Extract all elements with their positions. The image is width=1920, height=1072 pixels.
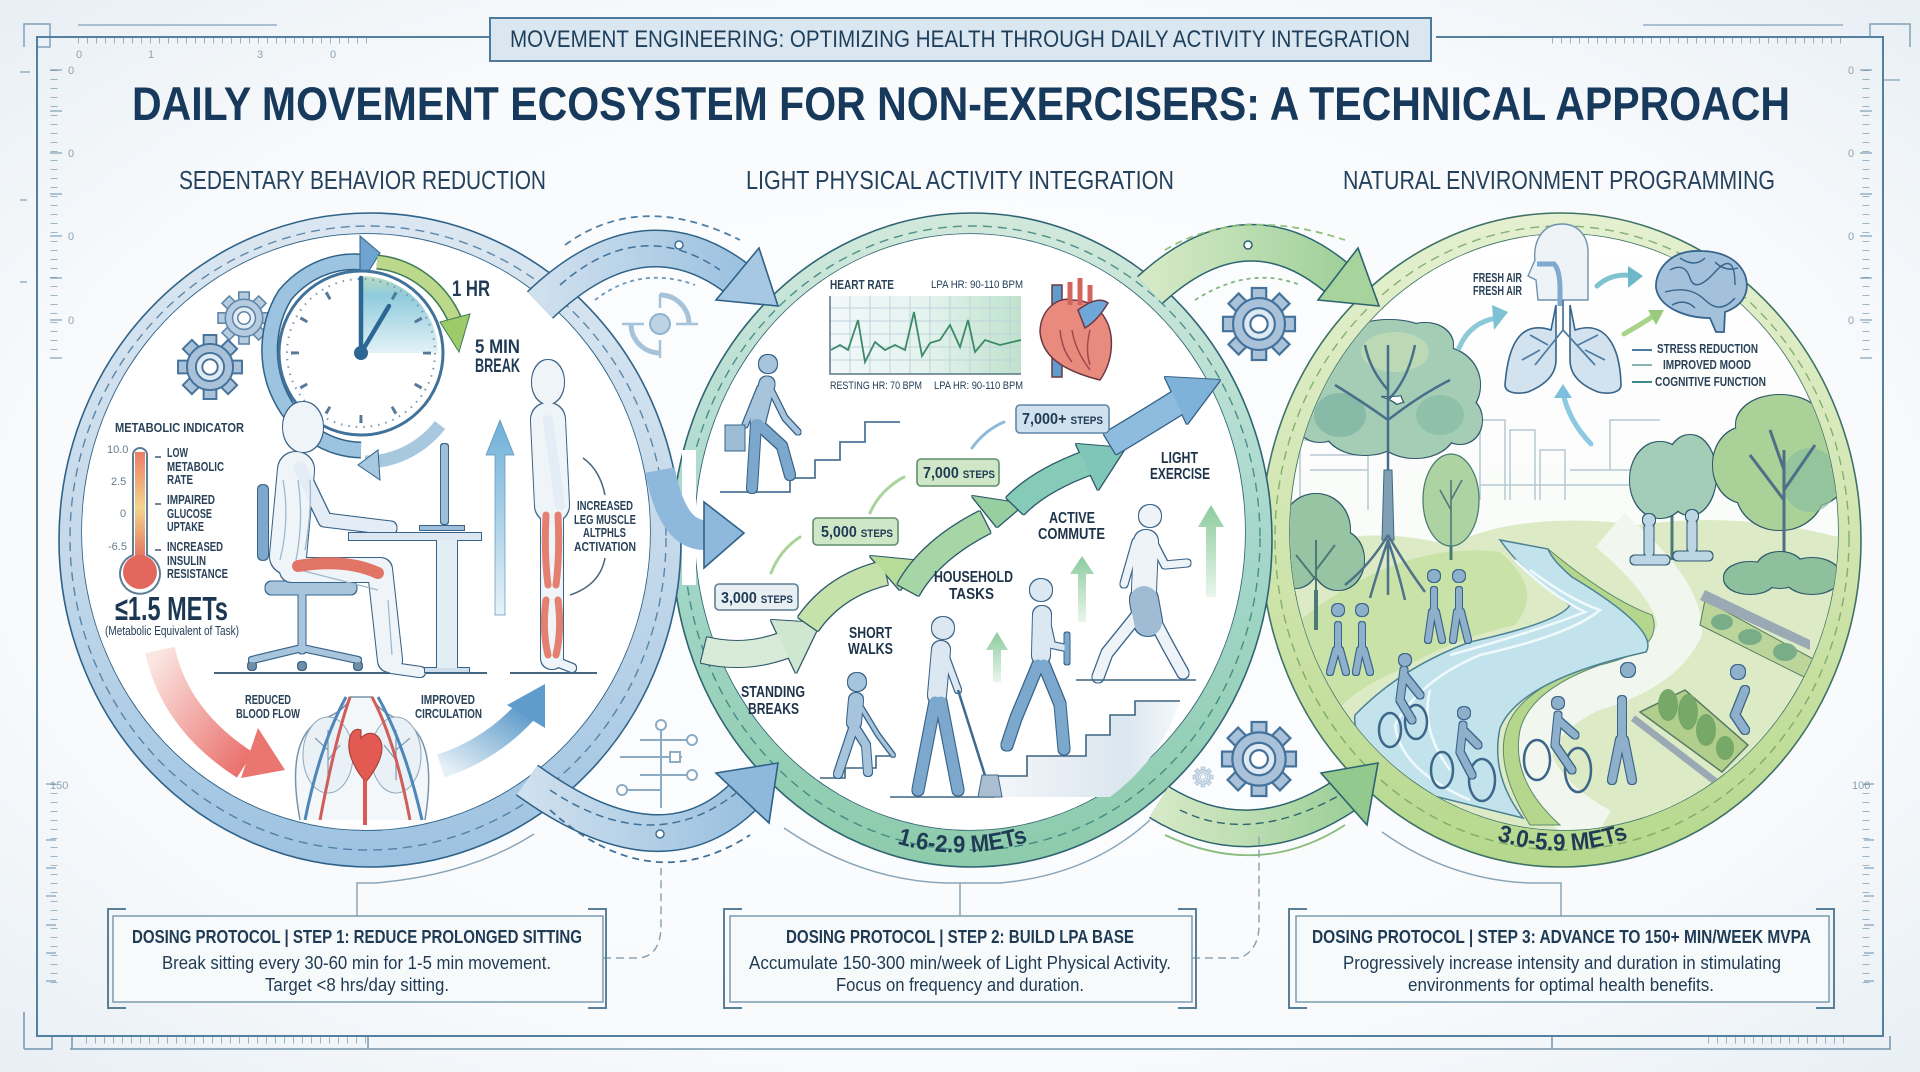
label: leg muscle: LEG MUSCLE (574, 513, 636, 527)
icon: small gear (1193, 767, 1213, 787)
ruler numbers: 150 (50, 780, 68, 792)
label: light exercise: LIGHT (1161, 450, 1198, 467)
step pill 5000: 5,000 STEPS (821, 524, 893, 541)
garden beds (1633, 590, 1815, 785)
lower staircase (820, 701, 1180, 797)
icon: target (622, 294, 698, 358)
heart rate chart (830, 296, 1021, 374)
walkers (1330, 570, 1468, 672)
label: active commute (1038, 510, 1105, 543)
ruler numbers: 0 (1848, 65, 1854, 77)
label: light exercise (1150, 450, 1210, 483)
dosing box 3: DOSING PROTOCOL | STEP 3: ADVANCE TO 150+ MIN/WEEK MVPA (1312, 927, 1811, 947)
chart labels: LPA HR: 90-110 BPM (931, 279, 1023, 291)
benefits legend: COGNITIVE FUNCTION (1655, 375, 1766, 389)
ruler numbers: 0 (330, 49, 336, 61)
clock face (279, 271, 443, 435)
step pill 7000+ (1016, 405, 1109, 433)
label: leg muscle: INCREASED (577, 499, 633, 513)
metabolic indicator: INCREASED (167, 540, 223, 554)
ground (1280, 520, 1850, 840)
label: improved circulation (415, 693, 482, 721)
icon: gear connector upper (1223, 288, 1295, 360)
label: 5 min break: BREAK (475, 356, 520, 377)
panel: respiratory and brain (1459, 224, 1766, 444)
ring: natural environment (1261, 213, 1861, 867)
connector: bottom 2 to 3 (1159, 763, 1378, 828)
metabolic indicator: -6.5 (108, 541, 127, 553)
standing figure (510, 360, 597, 673)
arrow: improved flow (441, 684, 545, 766)
metabolic indicator: 0 (120, 508, 126, 520)
panel: natural environment scene (1271, 320, 1850, 840)
ring: light activity (672, 213, 1272, 867)
metabolic indicator: 10.0 (107, 444, 128, 456)
step pill 5000 (813, 518, 898, 545)
meditators (1635, 510, 1708, 560)
step pill 7000 (917, 459, 999, 486)
connector: top 1 to 2 (540, 241, 778, 306)
step pill 3000 (715, 584, 798, 610)
ring label: light mets (898, 828, 1026, 853)
ruler numbers: 0 (76, 49, 82, 61)
label: 1 hr: 1 HR (452, 276, 490, 301)
label: fresh air (1473, 271, 1522, 298)
header banner: MOVEMENT ENGINEERING: OPTIMIZING HEALTH THROUGH DAILY ACTIVITY INTEGRATION (510, 26, 1410, 53)
label: standing breaks: BREAKS (748, 701, 799, 718)
gardeners (1612, 663, 1745, 780)
ring details (70, 226, 1849, 850)
cyclists (1379, 705, 1591, 801)
tree: small left (1290, 493, 1365, 630)
dosing box 3 (1289, 909, 1834, 1008)
up arrows (986, 505, 1224, 682)
sitting figure and desk (214, 402, 487, 673)
label: short walks: SHORT (849, 625, 892, 642)
metabolic indicator: INSULIN (167, 554, 206, 568)
label: short walks (848, 625, 893, 658)
rising arrow 1 (704, 620, 820, 673)
dosing box 2: Accumulate 150-300 min/week of Light Physical Activity. (749, 953, 1171, 973)
ruler numbers: 0 (68, 65, 74, 77)
metabolic indicator (107, 421, 244, 594)
hill: left bank (1300, 550, 1527, 720)
person: short walker (838, 673, 893, 774)
leader lines (357, 820, 1561, 958)
metabolic indicator: GLUCOSE (167, 507, 212, 521)
metabolic indicator: RESISTANCE (167, 567, 228, 581)
ring gap beside middle arrow (682, 450, 696, 585)
tree: big (1296, 320, 1482, 600)
label: leg muscle: ACTIVATION (574, 540, 636, 554)
panel: sedentary contents (105, 236, 636, 825)
dosing box 2 (724, 909, 1196, 1008)
mets value: ≤1.5 METs (115, 590, 228, 627)
right bank green (1503, 549, 1654, 825)
small arrows between pills (771, 422, 1004, 573)
rising arrow 5 (1110, 377, 1220, 444)
dosing box 1 (108, 909, 606, 1008)
header banner (490, 18, 1431, 61)
label: 5 min break (475, 337, 520, 377)
icon: head profile (1528, 224, 1588, 306)
ruler numbers: 0 (1848, 148, 1854, 160)
icon: circuit schematic (617, 720, 697, 808)
label: reduced blood flow: REDUCED (245, 693, 291, 707)
person: jogger (1098, 505, 1187, 677)
ring: sedentary (59, 213, 681, 867)
icon: lungs (1505, 300, 1621, 393)
ruler numbers: 0 (68, 315, 74, 327)
label: improved circulation: CIRCULATION (415, 707, 482, 721)
ruler numbers: 1 (148, 49, 154, 61)
tree: small middle (1423, 454, 1479, 560)
label: active commute: ACTIVE (1049, 510, 1095, 527)
trees (1271, 320, 1849, 630)
panel: light activity contents (700, 278, 1224, 853)
metabolic indicator: 2.5 (111, 476, 126, 488)
flow arrow heads (1492, 266, 1664, 398)
city outline (1300, 420, 1660, 510)
label: household tasks (934, 569, 1013, 603)
metabolic indicator: LOW (167, 446, 188, 460)
up arrow (486, 420, 514, 615)
stair climber (720, 355, 900, 492)
icon: gear connector lower (1222, 722, 1296, 796)
label: leg muscle: ALTPHLS (583, 526, 626, 540)
dosing box 3: environments for optimal health benefits. (1408, 975, 1714, 995)
label: short walks: WALKS (848, 641, 893, 658)
ruler numbers: 0 (68, 148, 74, 160)
tree: big right (1712, 394, 1836, 552)
dosing box 2: Focus on frequency and duration. (836, 975, 1084, 995)
rising arrow 3 (908, 496, 1024, 590)
label: light exercise: EXERCISE (1150, 466, 1210, 483)
pale path (1530, 530, 1680, 830)
dosing box 1: DOSING PROTOCOL | STEP 1: REDUCE PROLONGED SITTING (132, 927, 582, 947)
river (1355, 540, 1648, 818)
connector: top 2 to 3 (1150, 241, 1379, 306)
benefits legend (1632, 342, 1766, 389)
dosing box 3: Progressively increase intensity and duration in stimulating (1343, 953, 1781, 973)
label: 5 min break: 5 MIN (475, 337, 520, 358)
ruler numbers: 0 (1848, 231, 1854, 243)
connector: middle arrow 1 to 2 (660, 470, 744, 568)
ruler numbers (50, 49, 1870, 792)
ring label: moderate mets: 3.0-5.9 METs (1498, 826, 1626, 851)
label: fresh air: FRESH AIR (1473, 271, 1522, 285)
chart labels: HEART RATE (830, 278, 894, 292)
icon: brain (1656, 251, 1747, 332)
mets caption: (Metabolic Equivalent of Task) (105, 623, 239, 638)
clock green arc (377, 262, 470, 352)
ruler numbers: 0 (68, 231, 74, 243)
ruler numbers: 0 (1848, 315, 1854, 327)
icon: gear upper (218, 292, 270, 344)
connector: bottom 1 to 2 (527, 763, 778, 838)
label: household tasks: TASKS (949, 586, 994, 603)
ring label: moderate mets (1498, 826, 1626, 851)
label: leg muscle (570, 458, 636, 595)
clock arrow ring (270, 236, 440, 480)
heading: natural environment: NATURAL ENVIRONMENT PROGRAMMING (1343, 165, 1775, 195)
person: carrying water (1007, 579, 1067, 749)
icon: heart (1040, 278, 1111, 380)
bushes (1724, 552, 1840, 594)
metabolic indicator: METABOLIC (167, 460, 224, 474)
label: active commute: COMMUTE (1038, 526, 1105, 543)
metabolic indicator: RATE (167, 473, 193, 487)
step pill 7000: 7,000 STEPS (923, 465, 995, 482)
tree: mid right (1630, 435, 1716, 560)
label: fresh air: FRESH AIR (1473, 284, 1522, 298)
heading: sedentary: SEDENTARY BEHAVIOR REDUCTION (179, 165, 546, 195)
metabolic indicator: IMPAIRED (167, 493, 215, 507)
chart labels (830, 278, 1023, 392)
heart and circulation (296, 697, 429, 825)
label: standing breaks (741, 684, 805, 718)
flow arrows (1459, 275, 1655, 444)
benefits legend: STRESS REDUCTION (1657, 342, 1758, 356)
benefits legend: IMPROVED MOOD (1663, 358, 1751, 372)
ring label: light mets: 1.6-2.9 METs (898, 828, 1026, 853)
person: sweeping (918, 617, 1002, 797)
metabolic indicator: UPTAKE (167, 520, 204, 534)
dosing box 1: Break sitting every 30-60 min for 1-5 min movement. (162, 953, 551, 973)
river ripples (1395, 560, 1600, 800)
dosing box 1: Target <8 hrs/day sitting. (265, 975, 449, 995)
chart labels: RESTING HR: 70 BPM (830, 380, 922, 392)
label: standing breaks: STANDING (741, 684, 805, 701)
ruler numbers: 3 (257, 49, 263, 61)
step pill 7000+: 7,000+ STEPS (1022, 411, 1103, 428)
arrow: reduced flow (160, 650, 285, 778)
heading: light activity: LIGHT PHYSICAL ACTIVITY INTEGRATION (746, 165, 1174, 195)
floor line (1076, 679, 1196, 681)
ruler numbers: 100 (1852, 780, 1870, 792)
step pill 3000: 3,000 STEPS (721, 590, 793, 607)
dosing box 2: DOSING PROTOCOL | STEP 2: BUILD LPA BASE (786, 927, 1134, 947)
label: improved circulation: IMPROVED (421, 693, 475, 707)
icon: gear lower (178, 335, 242, 399)
dashed guide arrows (550, 216, 1345, 862)
rising arrow 2 (808, 556, 922, 624)
chart labels: LPA HR: 90-110 BPM (934, 380, 1023, 392)
rising arrow 4 (1015, 444, 1125, 506)
label: reduced blood flow (236, 693, 300, 721)
metabolic indicator: METABOLIC INDICATOR (115, 421, 244, 435)
label: reduced blood flow: BLOOD FLOW (236, 707, 300, 721)
label: household tasks: HOUSEHOLD (934, 569, 1013, 586)
